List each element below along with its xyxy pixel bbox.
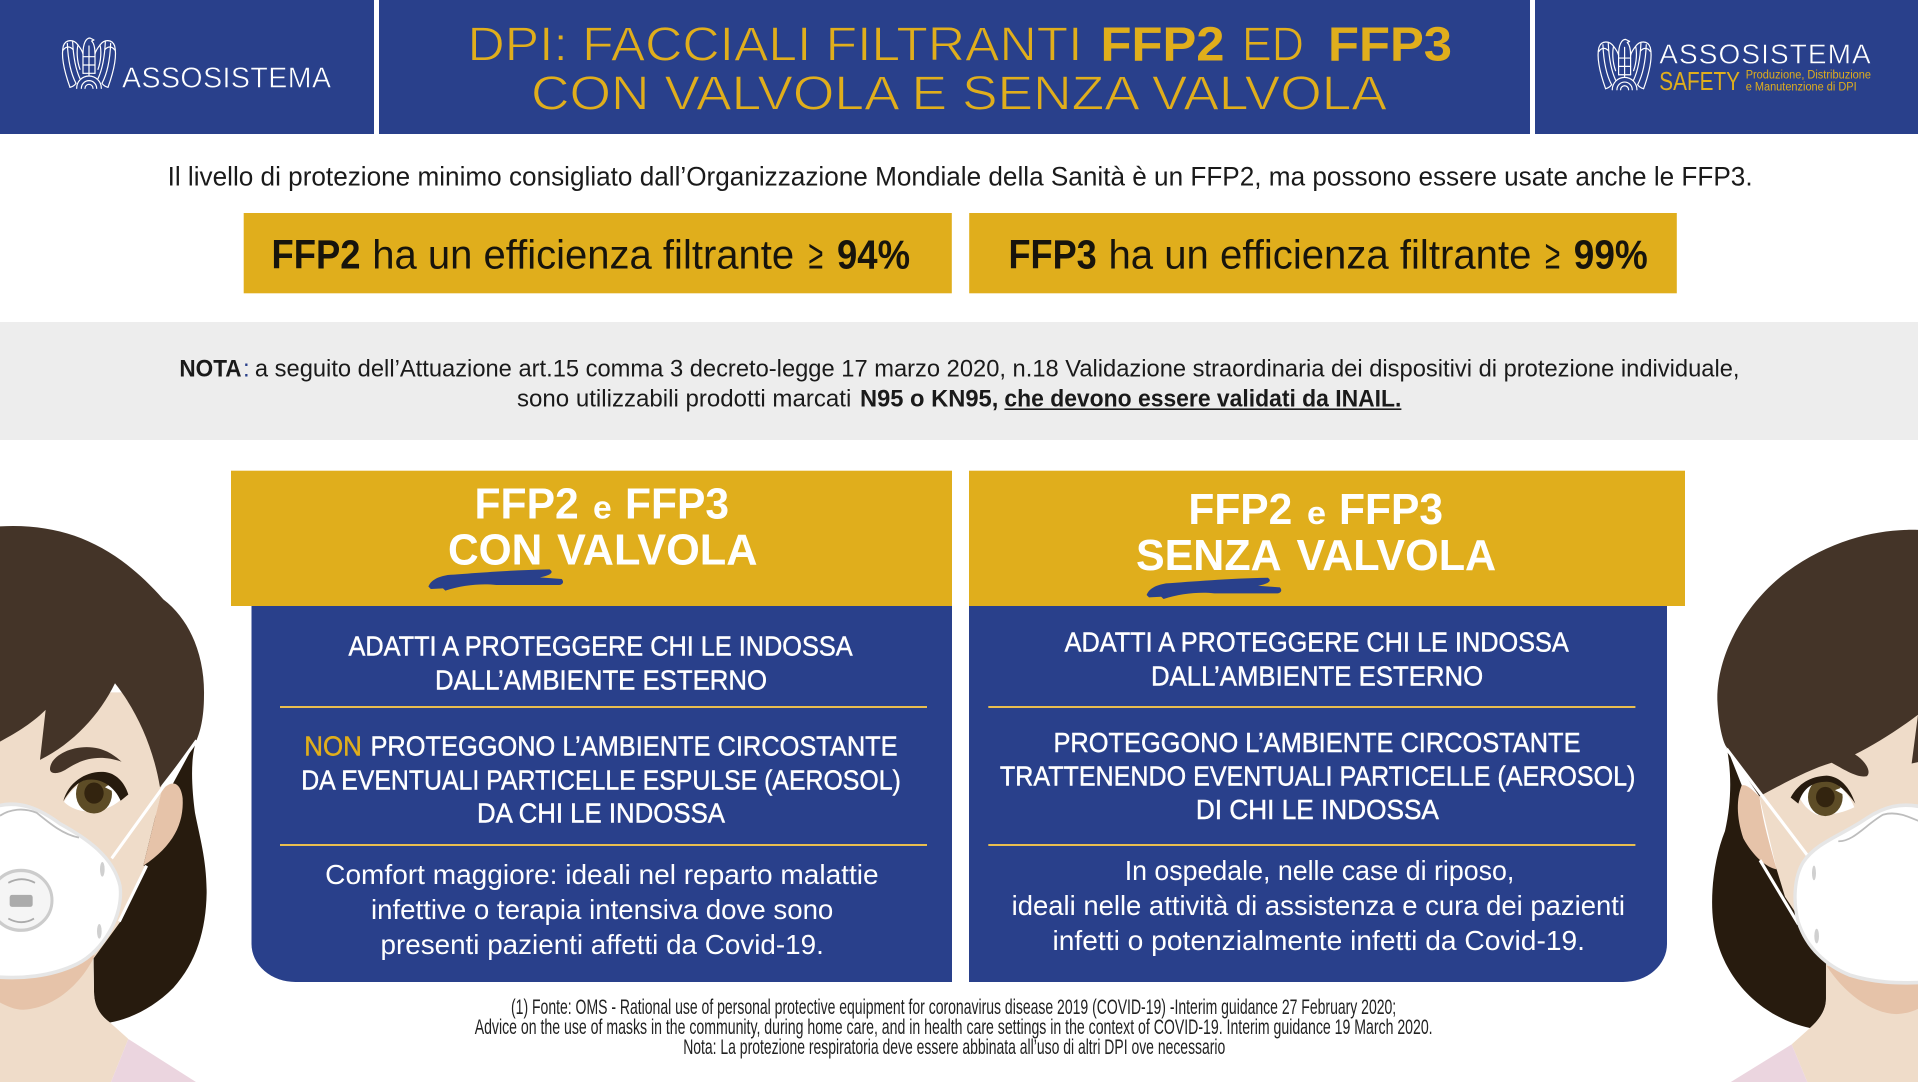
heading: SENZA xyxy=(1136,531,1282,580)
panel: nota: N95 o KN95, xyxy=(860,386,998,413)
heading: FFP3 xyxy=(1339,485,1443,534)
mask straps xyxy=(112,741,197,921)
back hair xyxy=(1712,747,1826,1028)
panel: con valvola xyxy=(231,471,952,982)
panel: FFP2 efficiency: FFP2 xyxy=(272,232,360,278)
hair xyxy=(0,526,204,787)
statement: does not protect environment: DA EVENTUALI PARTICELLE ESPULSE (AEROSOL) xyxy=(301,764,901,795)
skin xyxy=(1759,692,1918,1082)
heading xyxy=(231,471,952,606)
usage note: infettive o terapia intensiva dove sono xyxy=(371,894,833,925)
statement: does not protect environment: DA CHI LE INDOSSA xyxy=(477,798,726,829)
statement: protects environment: TRATTENENDO EVENTUALI PARTICELLE (AEROSOL) xyxy=(1000,761,1635,792)
panel: FFP3 efficiency: 99% xyxy=(1574,232,1648,278)
brush underline xyxy=(428,569,563,591)
usage note: In ospedale, nelle case di riposo, xyxy=(1125,855,1514,886)
illustration: woman with valved mask xyxy=(0,526,207,1082)
logo wordmark: ASSOSISTEMA xyxy=(1659,38,1871,69)
ear xyxy=(1738,785,1777,869)
eye xyxy=(63,772,128,814)
statement: does not protect environment: NON xyxy=(304,731,362,762)
heading: e xyxy=(593,489,612,525)
safety wordmark: SAFETY xyxy=(1659,66,1740,96)
panel: FFP2 efficiency: ≥ xyxy=(808,232,823,278)
ear xyxy=(143,784,183,866)
heading: FFP2 xyxy=(1188,485,1292,534)
statement: does not protect environment: PROTEGGONO L’AMBIENTE CIRCOSTANTE xyxy=(370,731,898,762)
logo tagline xyxy=(1746,69,1871,94)
eye xyxy=(1791,776,1855,816)
neck shadow xyxy=(0,955,95,1010)
logo tagline: e Manutenzione di DPI xyxy=(1746,82,1857,94)
logo: Assosistema Safety xyxy=(1598,38,1871,96)
statement: protects wearer: ADATTI A PROTEGGERE CHI LE INDOSSA xyxy=(348,631,853,662)
heading: VALVOLA xyxy=(557,526,758,575)
illustration: woman with unvalved mask xyxy=(1712,530,1918,1082)
clothing xyxy=(1727,1044,1808,1082)
usage note xyxy=(1012,855,1625,956)
footnote: Nota: La protezione respiratoria deve essere abbinata all’uso di altri DPI ove necessario xyxy=(683,1036,1225,1059)
panel: nota: sono utilizzabili prodotti marcati xyxy=(517,386,851,413)
statement: protects wearer xyxy=(1065,627,1569,692)
heading: VALVOLA xyxy=(1296,531,1496,580)
mask straps xyxy=(1727,749,1808,924)
back hair xyxy=(93,740,207,1023)
icon: eagle emblem xyxy=(1598,39,1651,90)
footnote xyxy=(475,996,1433,1059)
statement: protects environment xyxy=(1000,727,1635,825)
panel: FFP2 efficiency: 94% xyxy=(837,232,910,278)
eyebrow xyxy=(50,747,122,773)
statement: protects environment: PROTEGGONO L’AMBIENTE CIRCOSTANTE xyxy=(1054,727,1580,758)
heading: e xyxy=(1307,495,1326,531)
logo tagline: Produzione, Distribuzione xyxy=(1746,69,1871,81)
skin xyxy=(0,692,162,1082)
title xyxy=(468,19,1452,120)
hair xyxy=(1717,530,1918,796)
statement: protects wearer: DALL’AMBIENTE ESTERNO xyxy=(1151,661,1483,692)
statement: protects wearer xyxy=(348,631,853,695)
panel body xyxy=(969,606,1667,982)
statement: does not protect environment xyxy=(301,731,901,829)
panel: nota: : xyxy=(243,356,250,383)
footnote: (1) Fonte: OMS - Rational use of personal protective equipment for coronavirus disease 2019 (COVID-19) -Interim guidance 27 February 2020; xyxy=(511,996,1396,1019)
heading: FFP3 xyxy=(625,479,729,528)
statement: protects environment: DI CHI LE INDOSSA xyxy=(1196,794,1440,825)
usage note xyxy=(325,859,879,960)
panel: nota: NOTA xyxy=(179,356,242,383)
logo wordmark: ASSOSISTEMA xyxy=(122,63,331,95)
usage note: ideali nelle attività di assistenza e cura dei pazienti xyxy=(1012,890,1625,921)
usage note: presenti pazienti affetti da Covid-19. xyxy=(380,929,824,960)
mask xyxy=(0,804,120,978)
heading: FFP2 xyxy=(474,479,579,528)
footnote: Advice on the use of masks in the community, during home care, and in health care settings in the context of COVID-19. Interim guidance 19 March 2020. xyxy=(475,1016,1433,1039)
panel: FFP3 efficiency xyxy=(969,213,1677,293)
statement: protects wearer: DALL’AMBIENTE ESTERNO xyxy=(435,664,767,695)
title: FFP2 xyxy=(1100,19,1224,72)
panel: senza valvola xyxy=(969,471,1685,982)
clothing xyxy=(110,1039,200,1082)
valve xyxy=(0,870,52,930)
panel: FFP3 efficiency: FFP3 xyxy=(1008,232,1097,278)
intro sentence: Il livello di protezione minimo consigliato dall’Organizzazione Mondiale della Sanità è un FFP2, ma possono essere usate anche le FFP3. xyxy=(168,162,1753,192)
header band xyxy=(0,0,1918,134)
statement: protects wearer: ADATTI A PROTEGGERE CHI LE INDOSSA xyxy=(1065,627,1569,658)
logo: Assosistema xyxy=(63,38,331,95)
neck shadow xyxy=(1827,966,1918,1014)
brush underline xyxy=(1147,578,1281,599)
usage note: infetti o potenzialmente infetti da Covid-19. xyxy=(1052,925,1585,956)
heading: CON xyxy=(448,526,542,575)
panel: FFP3 efficiency: ha un efficienza filtrante xyxy=(1108,232,1531,278)
panel: FFP3 efficiency: ≥ xyxy=(1545,232,1560,278)
panel: FFP2 efficiency: ha un efficienza filtrante xyxy=(372,232,794,278)
mask xyxy=(1795,805,1918,983)
title: DPI: FACCIALI FILTRANTI xyxy=(468,19,1082,72)
usage note: Comfort maggiore: ideali nel reparto malattie xyxy=(325,859,879,890)
icon: eagle emblem xyxy=(63,38,115,88)
panel: nota: a seguito dell’Attuazione art.15 comma 3 decreto-legge 17 marzo 2020, n.18 Validazione straordinaria dei dispositivi di protezione individuale, xyxy=(255,356,1739,383)
panel body xyxy=(252,606,952,982)
title: ED xyxy=(1242,19,1304,72)
heading xyxy=(969,471,1685,606)
panel: FFP2 efficiency xyxy=(244,213,952,293)
title: FFP3 xyxy=(1328,19,1452,72)
panel: nota xyxy=(0,322,1918,440)
title: CON VALVOLA E SENZA VALVOLA xyxy=(531,67,1387,120)
panel: nota: che devono essere validati da INAIL. xyxy=(1004,386,1401,413)
